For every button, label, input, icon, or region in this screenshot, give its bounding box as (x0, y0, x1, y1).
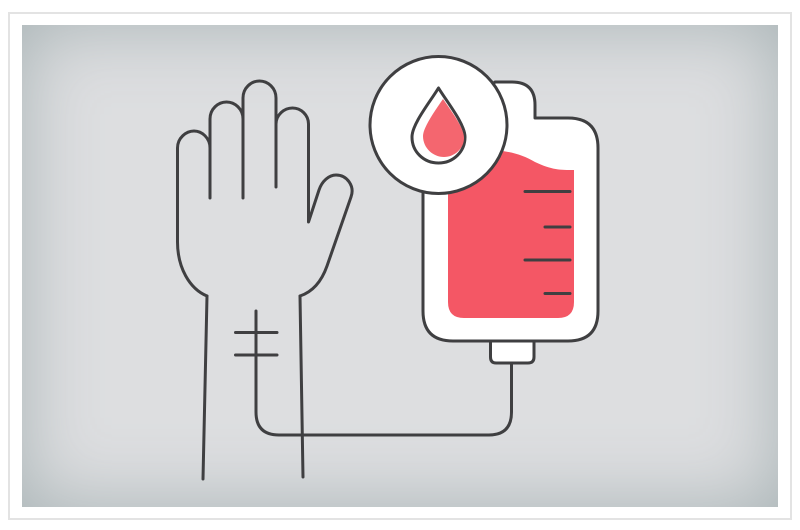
icon: blood drop badge (370, 56, 507, 194)
drop outline (412, 88, 465, 163)
icon: blood bag (423, 82, 598, 363)
bag body (423, 82, 598, 341)
icon: tube and tape (236, 311, 512, 435)
blood fill (448, 149, 574, 318)
drop fill (423, 99, 464, 157)
icon: hand and arm outline (177, 81, 352, 479)
bag connector (490, 341, 534, 363)
measurement ticks (525, 192, 570, 294)
